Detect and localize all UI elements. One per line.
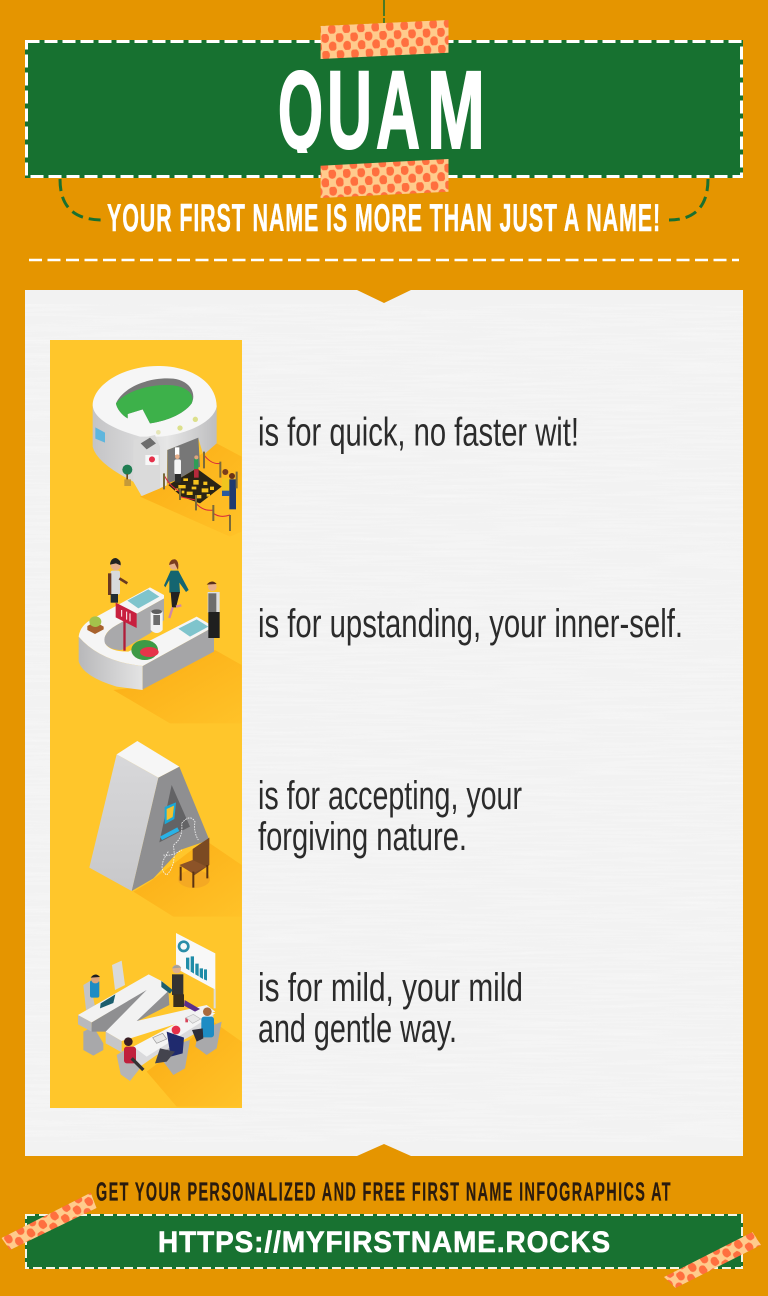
text: A line: forgiving nature. [258, 815, 467, 859]
right dashed connector [669, 179, 708, 220]
top tape [321, 20, 448, 59]
panel: content [25, 290, 743, 1156]
M letter sides [78, 1015, 92, 1032]
footer banner [25, 1214, 743, 1269]
footer tape right [664, 1232, 761, 1288]
title banner [25, 40, 743, 178]
title: M [427, 49, 485, 172]
illustration: A desk [89, 741, 242, 917]
text: A line [258, 774, 522, 859]
board [176, 933, 215, 990]
man right [208, 592, 220, 613]
text: M line: and gentle way. [258, 1007, 457, 1051]
divider [29, 259, 739, 261]
people [90, 980, 99, 998]
hanging string [383, 0, 385, 25]
left dashed connector [60, 179, 103, 220]
title: A [376, 49, 420, 172]
illustration: Q stadium [93, 366, 242, 537]
text: Q line: is for quick, no faster wit! [258, 410, 579, 454]
text: M line [258, 966, 523, 1051]
yellow column [50, 340, 242, 1108]
text: A line: is for accepting, your [258, 774, 522, 818]
chair back-left [112, 961, 125, 990]
M letter top [78, 974, 215, 1041]
footer tape left [2, 1193, 96, 1250]
text: M line: is for mild, your mild [258, 966, 523, 1010]
woman left [111, 571, 120, 595]
legs [83, 1027, 103, 1056]
woman centre [164, 571, 189, 593]
title: U [327, 49, 372, 172]
title [280, 70, 481, 153]
illustration: U counter [79, 558, 242, 723]
illustration: M meeting [78, 933, 242, 1107]
bottom tape [321, 159, 448, 198]
footer url: HTTPS://MYFIRSTNAME.ROCKS [158, 1226, 611, 1259]
title: Q [278, 49, 323, 172]
